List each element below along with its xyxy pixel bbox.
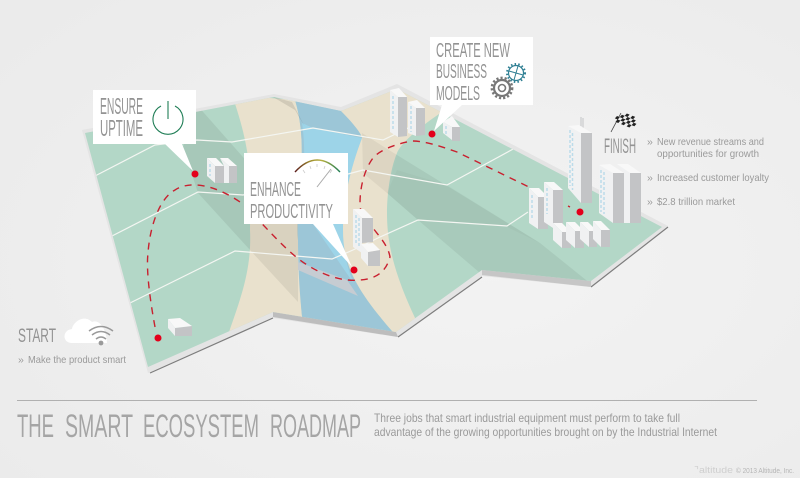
title: SMART bbox=[65, 408, 133, 444]
callout: enhance productivity: ENHANCE bbox=[250, 179, 301, 201]
marker: finish bbox=[576, 208, 584, 216]
callout: ensure uptime bbox=[93, 90, 196, 171]
divider rule bbox=[17, 400, 757, 401]
folded map bbox=[82, 84, 668, 374]
buildings: ensure uptime bbox=[207, 158, 237, 183]
buildings: finish bbox=[529, 117, 641, 248]
icon: checkered flag bbox=[611, 111, 641, 132]
icon: cloud with wifi bbox=[64, 319, 113, 345]
finish bullet list: » bbox=[647, 196, 653, 208]
finish bullet list: opportunities for growth bbox=[657, 148, 759, 160]
buildings: start bbox=[168, 318, 192, 336]
subtitle bbox=[374, 411, 718, 439]
title: ECOSYSTEM bbox=[143, 408, 259, 444]
finish bullet list: » bbox=[647, 136, 653, 148]
finish bullet list bbox=[647, 136, 770, 208]
title: ROADMAP bbox=[270, 408, 361, 444]
marker: ensure uptime bbox=[192, 170, 198, 178]
marker: enhance productivity bbox=[350, 266, 358, 274]
footer credit bbox=[694, 465, 794, 475]
start bullet: » bbox=[18, 354, 24, 366]
callout: create new business models: BUSINESS bbox=[436, 61, 487, 83]
finish bullet list: New revenue streams and bbox=[657, 136, 764, 148]
icon: gears bbox=[492, 64, 525, 98]
icon: power bbox=[153, 101, 183, 134]
buildings: enhance productivity bbox=[353, 209, 380, 266]
callout: enhance productivity bbox=[244, 153, 352, 267]
icon: gauge bbox=[295, 160, 340, 187]
finish bullet list: Increased customer loyalty bbox=[657, 172, 770, 184]
callout: ensure uptime: UPTIME bbox=[100, 115, 143, 141]
marker: create new business models bbox=[428, 130, 436, 138]
subtitle: Three jobs that smart industrial equipment must perform to take full bbox=[374, 411, 680, 425]
callout: ensure uptime: ENSURE bbox=[100, 93, 143, 119]
start heading: START bbox=[18, 326, 56, 347]
callout: create new business models bbox=[430, 37, 533, 131]
callout: enhance productivity: PRODUCTIVITY bbox=[250, 201, 333, 223]
buildings: create new business models bbox=[390, 88, 460, 141]
route: dashed red path bbox=[147, 141, 570, 327]
title bbox=[17, 408, 361, 444]
finish bullet list: $2.8 trillion market bbox=[657, 196, 735, 208]
finish bullet list: » bbox=[647, 172, 653, 184]
text: FINISH bbox=[604, 135, 636, 158]
title: THE bbox=[17, 408, 54, 444]
callout: create new business models: CREATE NEW bbox=[436, 40, 510, 62]
callout: create new business models: MODELS bbox=[436, 83, 480, 105]
marker: start bbox=[154, 334, 162, 342]
subtitle: advantage of the growing opportunities brought on by the Industrial Internet bbox=[374, 425, 718, 439]
footer credit: ⌝altitude bbox=[694, 465, 733, 475]
start bullet: Make the product smart bbox=[28, 354, 126, 366]
footer credit: © 2013 Altitude, Inc. bbox=[736, 467, 794, 475]
